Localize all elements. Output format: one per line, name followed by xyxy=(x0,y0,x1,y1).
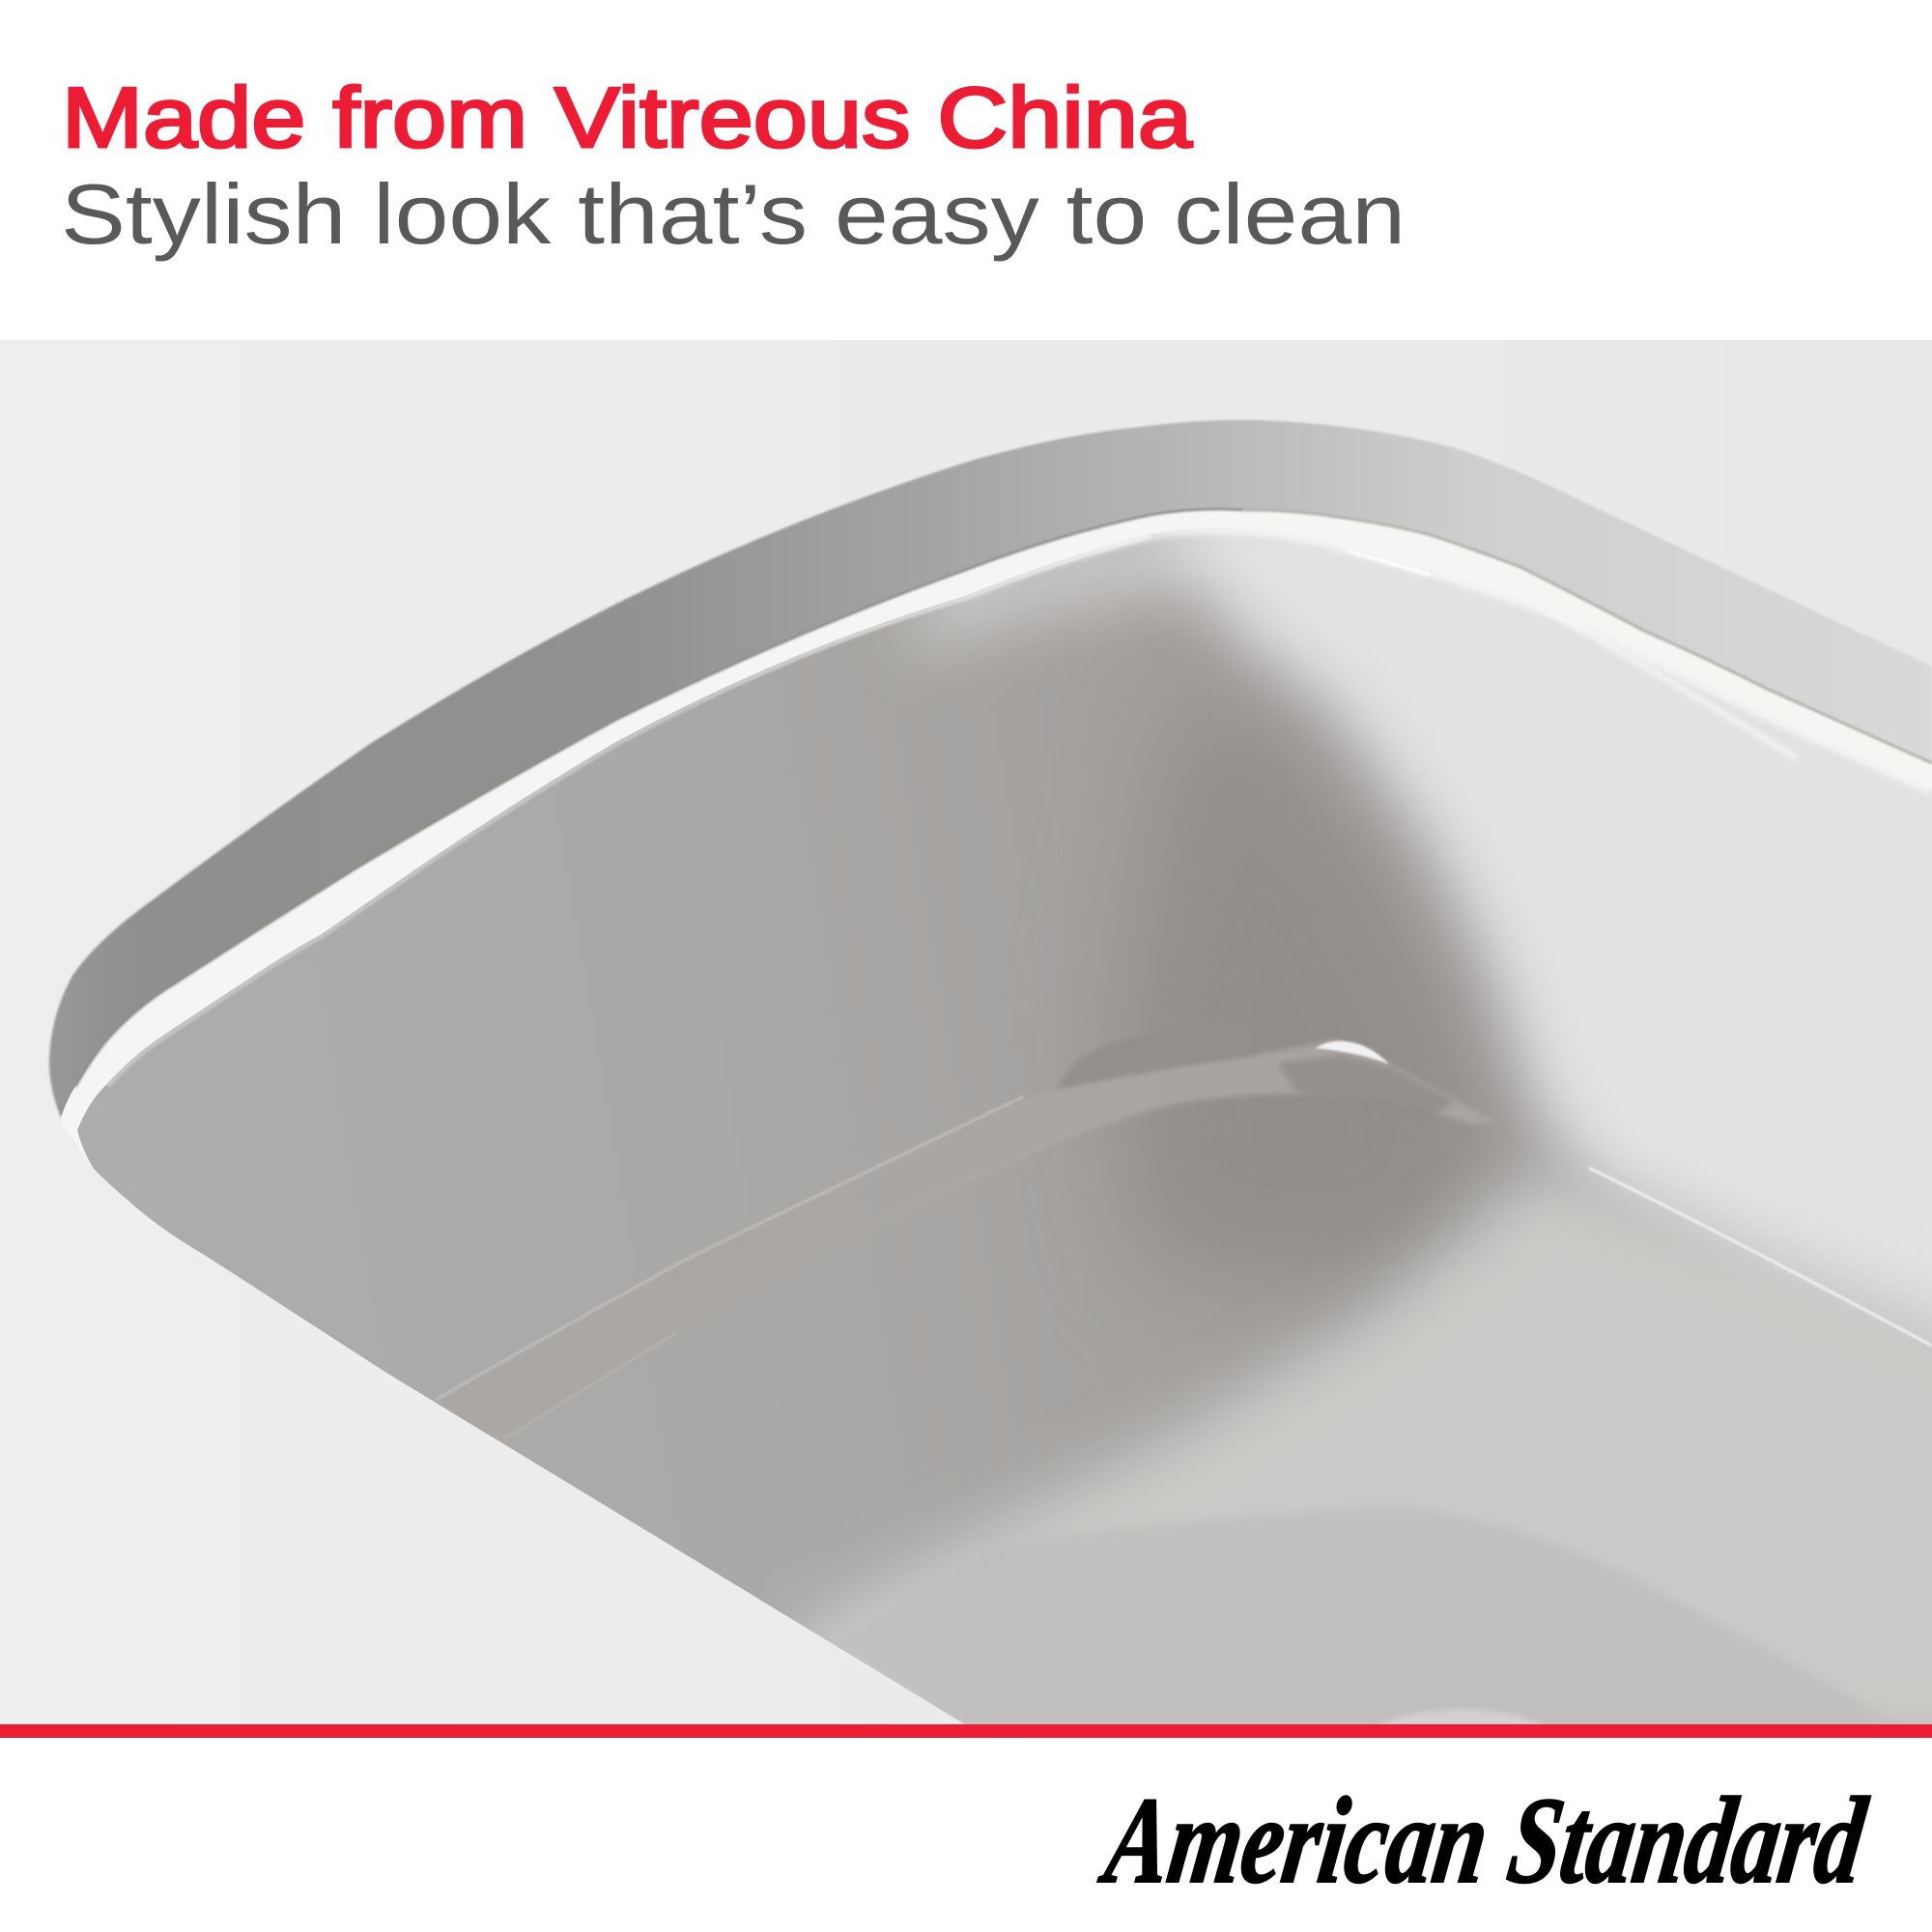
pale seam line on right side of rim xyxy=(1243,510,1932,763)
dark inner corner shadow xyxy=(1111,676,1497,1275)
red divider bar xyxy=(0,1724,1932,1738)
heading xyxy=(61,70,1406,262)
white glazed rim and bowl silhouette xyxy=(61,509,1932,1724)
lit band along left wall edge xyxy=(106,534,1151,1085)
fillet highlight, left xyxy=(436,1096,1024,1400)
left wall base tone xyxy=(0,483,1932,1739)
light right-hand wall xyxy=(1174,483,1932,1401)
sink illustration xyxy=(0,420,1932,1768)
fillet highlight, right xyxy=(1589,1168,1932,1346)
specular highlight on corner xyxy=(1316,1041,1389,1065)
lit upper band under rim near corner xyxy=(900,534,1208,663)
bowl interior xyxy=(77,528,1932,1724)
drain edge xyxy=(1381,1710,1540,1724)
title: red headline: Made from Vitreous China xyxy=(62,70,1192,165)
floor arc shading xyxy=(854,1511,1862,1719)
mottled reflection near corner xyxy=(1280,1055,1451,1115)
dark reflection above fillet xyxy=(1059,1043,1132,1090)
fillet secondary line xyxy=(504,1333,676,1439)
countertop surface xyxy=(0,340,1932,1725)
soft white glaze along right rim xyxy=(966,528,1932,789)
glaze highlight on corner rim xyxy=(1348,551,1430,575)
curved fillet between wall and floor xyxy=(436,1040,1500,1439)
dark seam line at rim edge xyxy=(75,509,1243,1087)
light floor of the bowl xyxy=(734,1169,1932,1758)
shadowed cut-out band around the sink xyxy=(49,420,1932,1159)
subtitle: grey tagline: Stylish look that’s easy to clean xyxy=(61,166,1406,262)
glaze highlight on right rim xyxy=(1569,624,1797,759)
